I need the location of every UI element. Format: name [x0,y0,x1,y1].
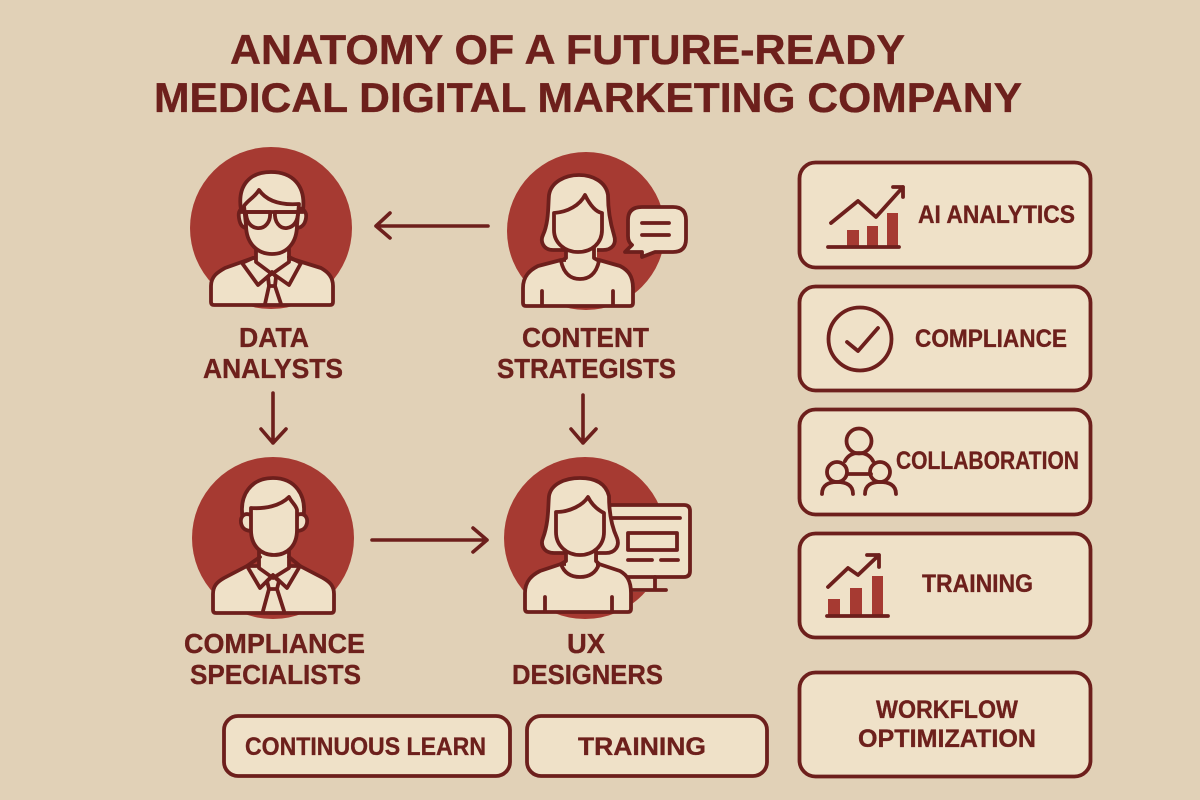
icon: monitor [596,505,690,590]
label: data analysts: ANALYSTS [203,353,343,384]
label: content strategists [497,322,676,384]
label: ux designers: UX [567,628,606,659]
card: collaboration: COLLABORATION [896,447,1079,475]
card: compliance [800,286,1090,390]
icon: content strategist avatar [507,152,665,310]
label: compliance specialists: SPECIALISTS [190,659,361,690]
label: compliance specialists: COMPLIANCE [184,628,365,659]
arrow: content strategists to data analysts [376,213,488,238]
icon: analytics chart [828,187,903,247]
card: workflow optimization [800,672,1090,776]
card: training bottom: TRAINING [578,733,706,761]
arrow: content strategists to ux designers [571,395,596,443]
label: compliance specialists [184,628,365,690]
icon: data analyst avatar [190,147,352,309]
label: data analysts: DATA [239,322,309,353]
label: content strategists: STRATEGISTS [497,353,676,384]
icon: compliance specialist avatar [192,457,354,619]
icon: speech bubble [625,207,686,257]
label: content strategists: CONTENT [522,322,649,353]
icon: team [822,428,896,494]
card: continuous learn: CONTINUOUS LEARN [245,733,486,761]
icon: growth chart [827,555,888,616]
icon: ux designer figure [525,478,631,612]
card: workflow optimization: WORKFLOW [876,696,1018,724]
icon: ux designer avatar [504,457,666,619]
card: continuous learn [224,716,510,776]
title [154,26,1022,121]
card: ai analytics: AI ANALYTICS [918,201,1075,229]
label: ux designers: DESIGNERS [512,659,663,690]
card: ai analytics [800,162,1090,268]
label: data analysts [203,322,343,384]
panel: ux designers [504,457,690,690]
card: training bottom [527,716,767,776]
title: ANATOMY OF A FUTURE-READY [230,26,905,73]
panel: data analysts [190,147,352,384]
icon: check circle [828,308,892,370]
card: training [800,534,1090,638]
panel: compliance specialists [184,457,365,690]
card: compliance: COMPLIANCE [915,325,1067,353]
card: training: TRAINING [922,570,1033,598]
label: ux designers [512,628,663,690]
arrow: data analysts to compliance specialists [261,393,286,443]
card: workflow optimization: OPTIMIZATION [858,725,1036,753]
card: collaboration [800,410,1090,514]
arrow: compliance specialists to ux designers [372,528,487,552]
panel: content strategists [497,152,686,384]
title: MEDICAL DIGITAL MARKETING COMPANY [154,74,1022,121]
